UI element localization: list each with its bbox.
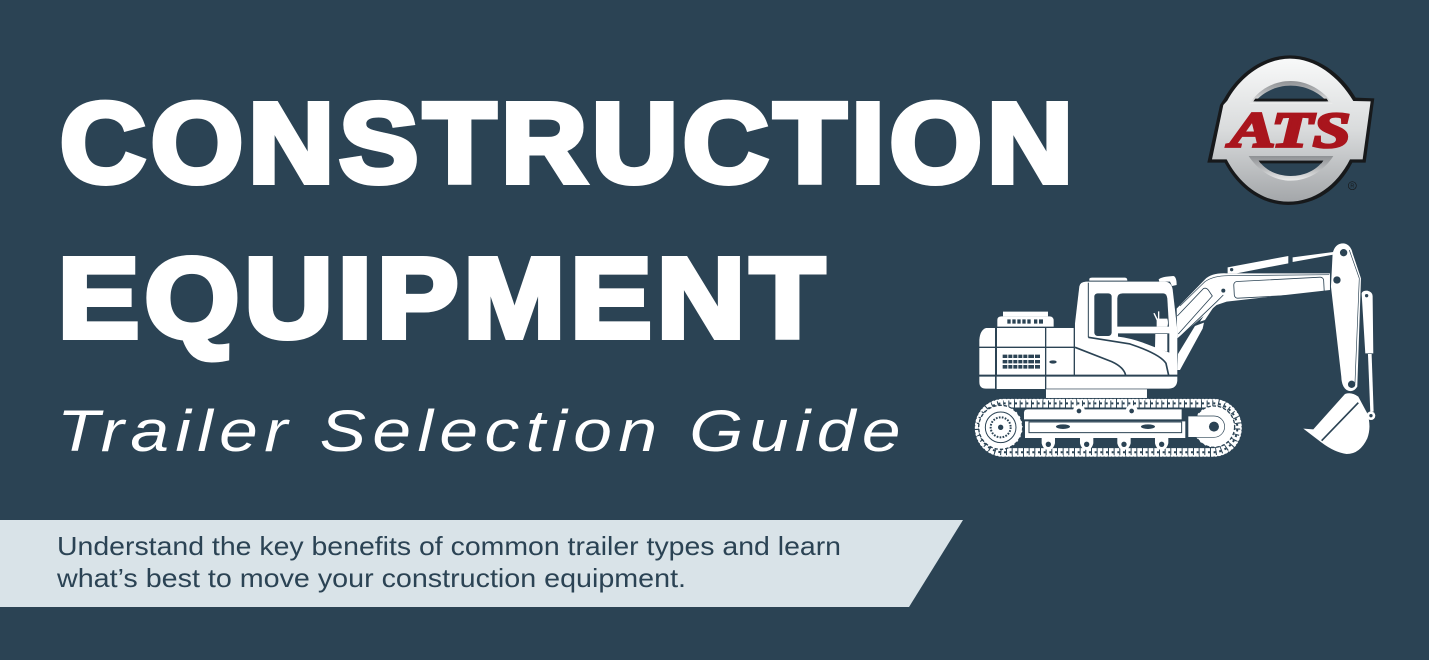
cab lines xyxy=(1075,283,1169,375)
arm outline xyxy=(1349,250,1359,383)
registered mark: R xyxy=(1350,184,1354,190)
title: Construction: CONSTRUCTION xyxy=(60,80,1078,206)
bucket xyxy=(1303,393,1369,454)
drive sprocket xyxy=(979,405,1023,449)
banner text line 2: what’s best to move your construction equipment. xyxy=(56,563,686,593)
arm xyxy=(1331,243,1361,391)
banner text line 1: Understand the key benefits of common trailer types and learn xyxy=(57,531,841,561)
logo letters: ATS xyxy=(1226,101,1351,157)
cab windows xyxy=(1094,293,1169,353)
boom panel outline xyxy=(1234,277,1324,298)
icon: ATS logo xyxy=(1207,55,1374,205)
title: Equipment: EQUIPMENT xyxy=(58,235,830,361)
track frame xyxy=(1024,405,1185,450)
cab seat xyxy=(1155,319,1168,352)
track xyxy=(976,400,1241,456)
icon: excavator xyxy=(976,243,1375,456)
idler wheel xyxy=(1188,406,1235,447)
excavator body xyxy=(979,276,1177,398)
boom xyxy=(1177,252,1333,370)
grilles xyxy=(1003,319,1057,369)
arm pins xyxy=(1221,249,1355,388)
banner xyxy=(0,520,963,607)
bucket cylinder xyxy=(1362,291,1375,420)
subtitle: Trailer Selection Guide xyxy=(57,398,901,464)
controls xyxy=(1153,311,1159,320)
grille slits xyxy=(1007,354,1035,369)
